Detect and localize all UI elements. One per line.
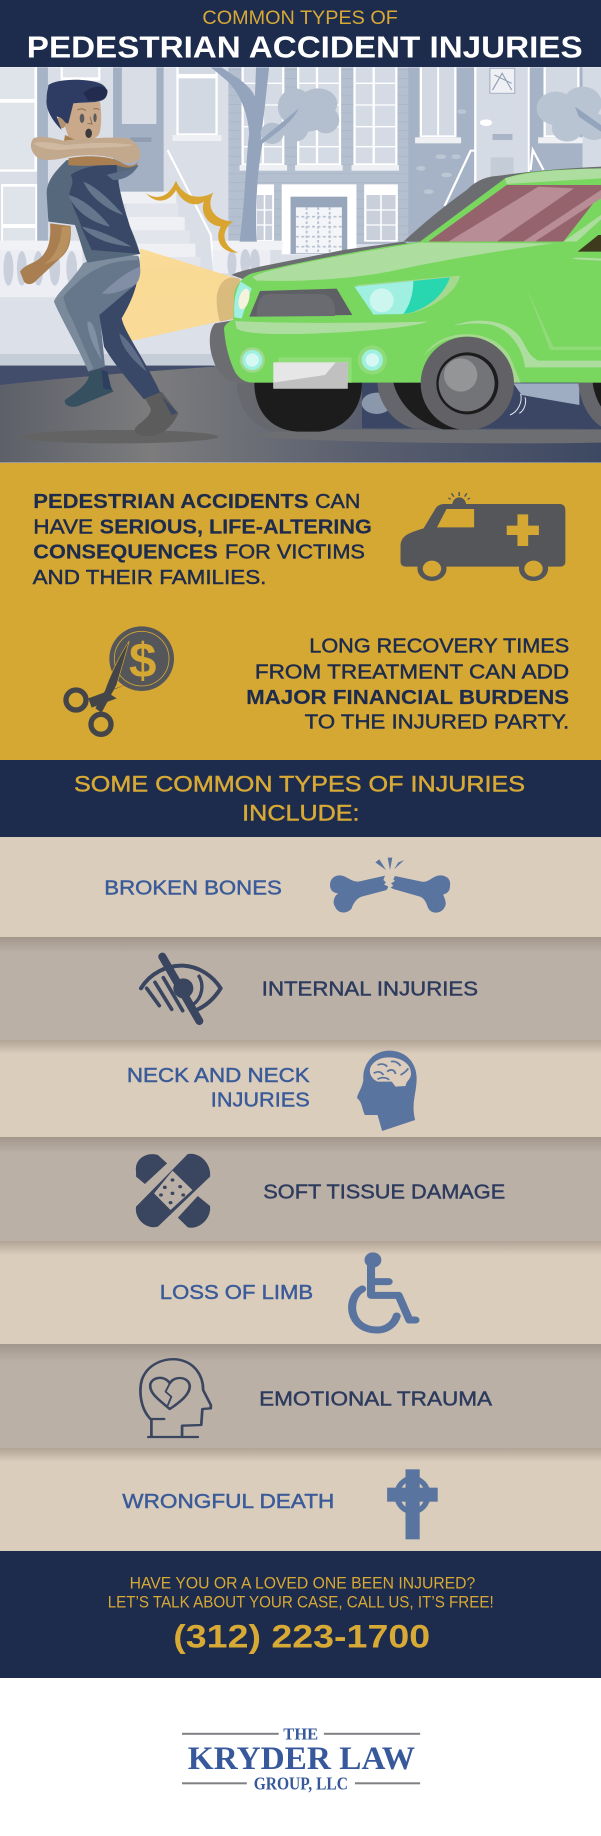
icon: head with broken heart xyxy=(140,1359,211,1437)
logo: The Kryder Law Group, LLC: KRYDER LAW xyxy=(188,1741,415,1777)
panel: injury row loss of limb xyxy=(0,1241,601,1344)
panel: injury row internal injuries xyxy=(0,937,601,1040)
heading: some common types of injuries: SOME COMMON TYPES OF INJURIES xyxy=(74,771,525,796)
hair xyxy=(46,80,107,130)
road xyxy=(0,366,601,463)
text block: pedestrian accidents consequences: CAN xyxy=(315,491,360,513)
street background buildings xyxy=(0,67,601,463)
icon: scissors cutting a dollar coin xyxy=(66,626,174,734)
text block: pedestrian accidents consequences: SERIOUS, LIFE-ALTERING xyxy=(100,516,372,538)
text block: pedestrian accidents consequences xyxy=(33,491,372,589)
stairs and railings xyxy=(0,150,544,367)
text block: pedestrian accidents consequences: CONSEQUENCES xyxy=(33,542,218,564)
icon: celtic cross xyxy=(387,1469,438,1539)
side headlight xyxy=(234,282,252,318)
icon: broken bone xyxy=(330,858,450,913)
panel: injury row soft tissue damage xyxy=(0,1137,601,1241)
icon: crossed out eye xyxy=(141,957,221,1021)
side highlights xyxy=(527,288,601,350)
panel: injury row neck injuries xyxy=(0,1040,601,1137)
heading: some common types of injuries xyxy=(0,760,601,837)
panel: injury row wrongful death: WRONGFUL DEATH xyxy=(122,1491,334,1513)
licence plate xyxy=(278,357,352,383)
text block: pedestrian accidents consequences: PEDESTRIAN ACCIDENTS xyxy=(33,491,309,513)
icon: crossed bandages xyxy=(136,1154,210,1228)
fog lights xyxy=(240,347,265,373)
front right wheel xyxy=(421,337,514,430)
logo: The Kryder Law Group, LLC: GROUP, LLC xyxy=(254,1773,348,1793)
car shadow outline xyxy=(403,167,601,243)
panel: injury row broken bones: BROKEN BONES xyxy=(104,878,282,900)
panel: injury row emotional trauma xyxy=(0,1344,601,1448)
main headlight xyxy=(357,276,460,315)
text block: recovery times and financial burdens: TO THE INJURED PARTY. xyxy=(305,712,569,734)
trees xyxy=(211,67,601,242)
panel: injury row wrongful death xyxy=(0,1448,601,1551)
phone number: (312) 223-1700 xyxy=(173,1618,430,1654)
icon: ambulance xyxy=(401,492,565,581)
right shoe xyxy=(135,392,178,436)
neck xyxy=(64,135,75,140)
panel: injury row emotional trauma: EMOTIONAL TRAUMA xyxy=(259,1389,493,1411)
title: main heading: PEDESTRIAN ACCIDENT INJURIES xyxy=(27,29,583,64)
hood highlight xyxy=(253,243,553,281)
call to action text line two: LET’S TALK ABOUT YOUR CASE, CALL US, IT’S FREE! xyxy=(108,1594,494,1612)
panel: injury row neck injuries: INJURIES xyxy=(211,1090,310,1112)
crossed arms xyxy=(68,156,139,167)
panel: injury row broken bones xyxy=(0,837,601,937)
headlight beam, impact spark and pedestrian figure xyxy=(18,80,240,443)
text block: recovery times and financial burdens: MAJOR FINANCIAL BURDENS xyxy=(246,687,569,709)
ground shadow xyxy=(18,430,218,443)
title banner xyxy=(0,0,601,67)
impact spark xyxy=(146,181,238,253)
text block: pedestrian accidents consequences: HAVE xyxy=(33,516,93,538)
icon: wheelchair xyxy=(352,1252,415,1330)
headlight beam xyxy=(122,248,240,342)
text block: recovery times and financial burdens: FROM TREATMENT CAN ADD xyxy=(255,662,569,684)
car body xyxy=(224,242,601,383)
text block: recovery times and financial burdens: LONG RECOVERY TIMES xyxy=(309,636,569,658)
panel: injury row loss of limb: LOSS OF LIMB xyxy=(160,1282,313,1304)
icon: head with brain xyxy=(357,1051,417,1131)
tyres xyxy=(237,384,254,421)
text block: pedestrian accidents consequences: AND THEIR FAMILIES. xyxy=(33,567,266,589)
logo: The Kryder Law Group, LLC: THE xyxy=(283,1724,318,1743)
panel: injury row internal injuries: INTERNAL INJURIES xyxy=(262,979,478,1001)
panel: gold facts section xyxy=(0,463,601,760)
panel: injury row neck injuries: NECK AND NECK xyxy=(127,1065,310,1087)
green car xyxy=(210,167,601,443)
illustration: pedestrian struck by green car xyxy=(0,67,601,463)
logo: The Kryder Law Group, LLC xyxy=(182,1724,420,1793)
title: eyebrow: COMMON TYPES OF xyxy=(202,7,398,29)
back arm xyxy=(20,223,71,284)
left shoe xyxy=(65,368,113,407)
grille xyxy=(249,289,352,317)
icon: scissors cutting a dollar coin: $ xyxy=(129,634,156,689)
right leg xyxy=(99,283,161,399)
car roof and window xyxy=(420,168,601,243)
call to action text: HAVE YOU OR A LOVED ONE BEEN INJURED? xyxy=(130,1575,475,1593)
call to action panel xyxy=(0,1551,601,1678)
text block: recovery times and financial burdens xyxy=(246,636,569,734)
text block: pedestrian accidents consequences: FOR VICTIMS xyxy=(225,542,365,564)
bumper highlight xyxy=(235,321,428,334)
face xyxy=(65,102,101,140)
dark road under the car xyxy=(362,382,559,428)
panel: injury row soft tissue damage: SOFT TISSUE DAMAGE xyxy=(263,1181,505,1203)
left leg xyxy=(54,255,140,372)
heading: some common types of injuries: INCLUDE: xyxy=(242,801,360,826)
shirt xyxy=(47,160,140,263)
